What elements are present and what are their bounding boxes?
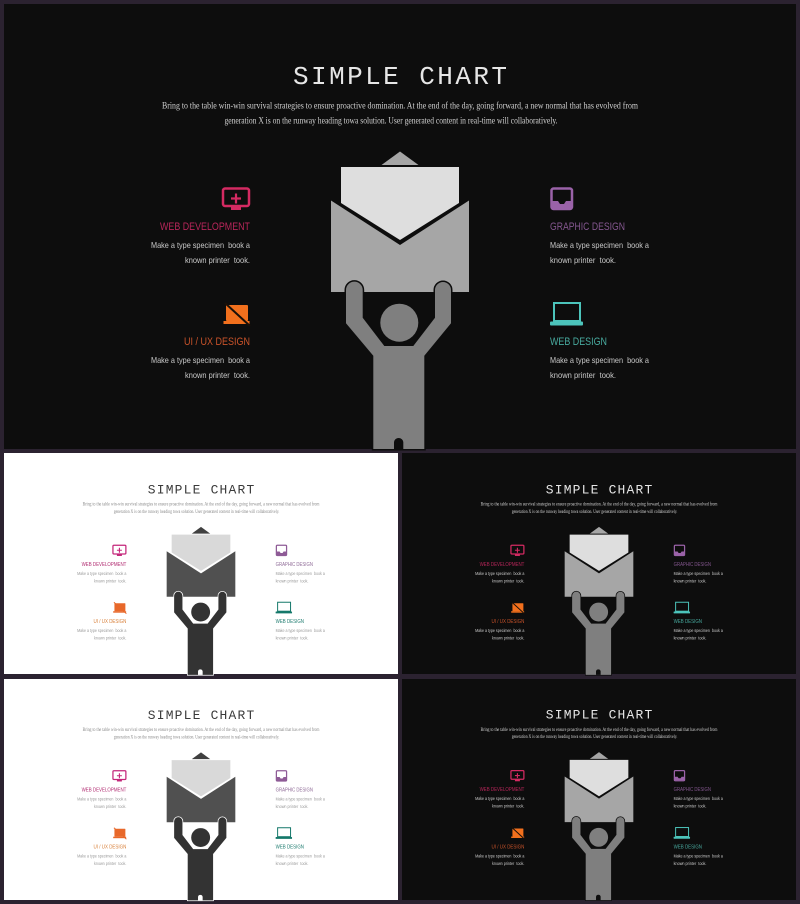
figure: person holding envelope [565, 752, 633, 900]
figure: person holding envelope [331, 152, 469, 449]
body text: web design [674, 628, 723, 641]
body text: web development: known printer took. [185, 255, 250, 265]
icon: crossed-out laptop [511, 602, 524, 614]
body text: ui ux design [77, 854, 127, 866]
panel: small dark slide top [402, 453, 796, 675]
panel: main dark slide [4, 4, 796, 449]
intro text: Bring to the table win-win survival strategies to ensure proactive domination. At the end of the day, going forward, a new normal that has evolved from [162, 100, 638, 112]
label: web development: WEB DEVELOPMENT [160, 221, 250, 233]
body text: ui ux design [151, 355, 250, 380]
label: graphic design: GRAPHIC DESIGN [674, 787, 711, 793]
slide content [475, 708, 723, 900]
body text: ui ux design [475, 853, 525, 866]
title: SIMPLE CHART [546, 482, 652, 497]
body text: web development [475, 571, 525, 583]
body text: web design [276, 628, 325, 641]
body text: graphic design [674, 796, 723, 809]
body text: graphic design: known printer took. [674, 578, 706, 583]
label: ui ux design: UI / UX DESIGN [492, 619, 524, 625]
icon: monitor with plus [511, 545, 524, 556]
icon: crossed-out laptop [113, 602, 126, 614]
body text: web development: Make a type specimen book a [77, 796, 127, 801]
body text: web development: Make a type specimen book a [475, 571, 525, 576]
figure: person holding envelope [167, 752, 235, 900]
intro text: Bring to the table win-win survival strategies to ensure proactive domination. At the end of the day, going forward, a new normal that has evolved from [83, 502, 320, 507]
body text: web design: known printer took. [674, 636, 706, 641]
figure: person holding envelope [565, 527, 633, 675]
body text: web development: known printer took. [94, 578, 126, 583]
body text: ui ux design: Make a type specimen book a [77, 854, 127, 859]
body text: web development: Make a type specimen book a [475, 796, 525, 801]
body text: web development [77, 571, 127, 583]
body text: ui ux design: Make a type specimen book a [151, 355, 250, 365]
icon: inbox tray [674, 545, 685, 555]
body text: web design: Make a type specimen book a [674, 628, 723, 633]
body text: web development: known printer took. [492, 804, 524, 809]
intro text [162, 100, 638, 126]
label: ui ux design: UI / UX DESIGN [94, 845, 126, 851]
intro text: generation X is on the runway heading towa solution. User generated content in real-time will collaboratively. [224, 116, 558, 126]
body text: graphic design: Make a type specimen book a [276, 796, 325, 801]
body text: graphic design: known printer took. [276, 578, 308, 583]
panel: small dark slide bottom [402, 679, 796, 900]
body text: web design: known printer took. [550, 370, 616, 380]
title: SIMPLE CHART [293, 62, 507, 92]
label: web design: WEB DESIGN [550, 336, 607, 348]
icon: crossed-out laptop [224, 303, 250, 326]
body text: ui ux design: Make a type specimen book a [475, 853, 525, 858]
body text: graphic design: Make a type specimen book a [550, 240, 649, 250]
body text: ui ux design: known printer took. [185, 370, 250, 380]
body text: web development [151, 240, 250, 265]
body text: ui ux design: known printer took. [94, 861, 126, 866]
label: web design: WEB DESIGN [276, 619, 304, 625]
intro text: generation X is on the runway heading towa solution. User generated content in real-time will collaboratively. [114, 510, 279, 515]
body text: web development [475, 796, 525, 809]
body text: web design: known printer took. [276, 636, 308, 641]
label: web design: WEB DESIGN [276, 845, 304, 851]
icon: crossed-out laptop [511, 828, 524, 839]
icon: monitor with plus [113, 545, 126, 556]
intro text [481, 502, 718, 515]
label: graphic design: GRAPHIC DESIGN [550, 221, 625, 233]
icon: crossed-out laptop [113, 828, 126, 839]
label: web design: WEB DESIGN [674, 619, 702, 625]
body text: web design [276, 854, 325, 866]
body text: graphic design [674, 571, 723, 583]
body text: graphic design: known printer took. [276, 804, 308, 809]
icon: laptop [674, 828, 690, 839]
body text: web design: Make a type specimen book a [276, 628, 325, 633]
body text: graphic design: Make a type specimen book a [674, 796, 723, 801]
body text: web development [77, 796, 127, 809]
icon: monitor with plus [223, 188, 249, 210]
panel: small light slide top [4, 453, 398, 675]
label: graphic design: GRAPHIC DESIGN [674, 562, 711, 568]
body text: ui ux design: Make a type specimen book a [77, 628, 127, 633]
label: web development: WEB DEVELOPMENT [82, 562, 127, 568]
body text: web development: Make a type specimen book a [151, 240, 250, 250]
body text: graphic design: known printer took. [550, 255, 616, 265]
label: ui ux design: UI / UX DESIGN [492, 844, 524, 850]
body text: graphic design [276, 571, 325, 583]
label: ui ux design: UI / UX DESIGN [94, 619, 126, 625]
icon: monitor with plus [113, 771, 126, 781]
body text: web design: known printer took. [674, 861, 706, 866]
icon: laptop [276, 602, 292, 613]
intro text: Bring to the table win-win survival strategies to ensure proactive domination. At the end of the day, going forward, a new normal that has evolved from [83, 728, 320, 733]
body text: web development: known printer took. [94, 804, 126, 809]
figure: person holding envelope [167, 527, 235, 675]
slide content [77, 708, 325, 900]
slide content [475, 482, 723, 675]
icon: laptop [674, 602, 690, 613]
body text: web design: Make a type specimen book a [276, 854, 325, 859]
body text: graphic design: known printer took. [674, 804, 706, 809]
intro text: generation X is on the runway heading towa solution. User generated content in real-time will collaboratively. [512, 510, 677, 515]
title: SIMPLE CHART [148, 708, 254, 723]
icon: monitor with plus [511, 771, 524, 781]
icon: inbox tray [276, 771, 287, 781]
icon: inbox tray [552, 188, 572, 209]
body text: graphic design: Make a type specimen book a [276, 571, 325, 576]
body text: graphic design: Make a type specimen book a [674, 571, 723, 576]
title: SIMPLE CHART [546, 708, 652, 723]
intro text [83, 728, 320, 740]
body text: graphic design [550, 240, 649, 265]
icon: inbox tray [674, 771, 685, 781]
label: web development: WEB DEVELOPMENT [82, 787, 127, 793]
body text: web design: Make a type specimen book a [550, 355, 649, 365]
label: graphic design: GRAPHIC DESIGN [276, 787, 313, 793]
body text: ui ux design: known printer took. [492, 861, 524, 866]
icon: laptop [276, 828, 292, 839]
panel: small light slide bottom [4, 679, 398, 900]
intro text [481, 728, 718, 740]
body text: web design [674, 853, 723, 866]
label: web design: WEB DESIGN [674, 844, 702, 850]
icon: laptop [550, 303, 583, 326]
intro text: Bring to the table win-win survival strategies to ensure proactive domination. At the end of the day, going forward, a new normal that has evolved from [481, 728, 718, 733]
intro text [83, 502, 320, 515]
body text: web development: known printer took. [492, 578, 524, 583]
body text: web design: Make a type specimen book a [674, 853, 723, 858]
title: SIMPLE CHART [148, 482, 254, 497]
icon: inbox tray [276, 545, 287, 555]
label: web development: WEB DEVELOPMENT [480, 562, 525, 568]
body text: ui ux design: known printer took. [94, 636, 126, 641]
intro text: generation X is on the runway heading towa solution. User generated content in real-time will collaboratively. [114, 735, 279, 740]
body text: ui ux design: known printer took. [492, 636, 524, 641]
slide content [77, 482, 325, 675]
body text: graphic design [276, 796, 325, 809]
label: web development: WEB DEVELOPMENT [480, 787, 525, 793]
body text: web development: Make a type specimen book a [77, 571, 127, 576]
label: graphic design: GRAPHIC DESIGN [276, 562, 313, 568]
body text: web design: known printer took. [276, 861, 308, 866]
body text: web design [550, 355, 649, 380]
body text: ui ux design: Make a type specimen book a [475, 628, 525, 633]
label: ui ux design: UI / UX DESIGN [184, 336, 250, 348]
body text: ui ux design [475, 628, 525, 641]
body text: ui ux design [77, 628, 127, 641]
intro text: Bring to the table win-win survival strategies to ensure proactive domination. At the end of the day, going forward, a new normal that has evolved from [481, 502, 718, 507]
intro text: generation X is on the runway heading towa solution. User generated content in real-time will collaboratively. [512, 735, 677, 740]
